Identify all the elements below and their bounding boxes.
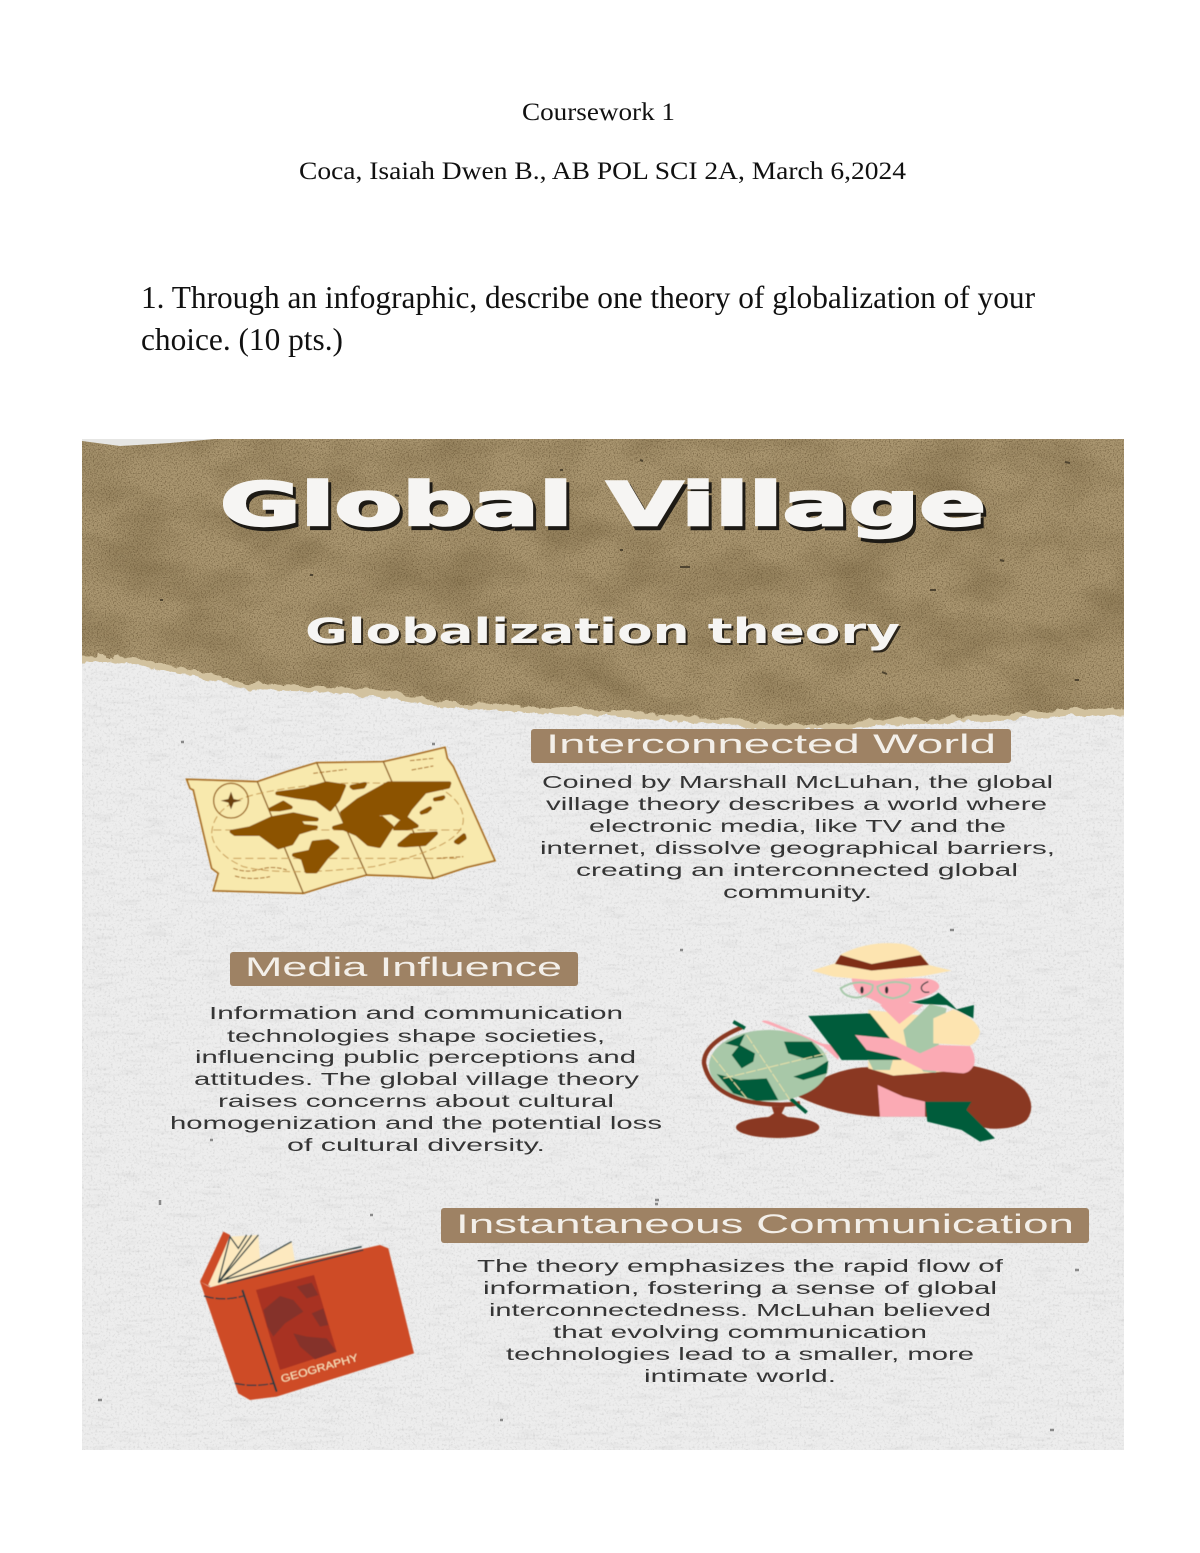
text block: Instantaneous Communication: that evolving communication (553, 1322, 927, 1342)
subtitle (305, 612, 902, 654)
legs (798, 1066, 1031, 1129)
text block: Instantaneous Communication: information, fostering a sense of global (483, 1278, 997, 1298)
title (220, 470, 989, 544)
heading: Interconnected World: Interconnected World (546, 729, 996, 759)
title: Global Village (223, 474, 989, 544)
document heading: coursework title: Coursework 1 (522, 99, 675, 126)
text block: Media Influence: of cultural diversity. (287, 1135, 545, 1155)
globe stand (704, 1027, 800, 1105)
icon: explorer with globe (704, 943, 1031, 1142)
text block: Interconnected World (540, 772, 1055, 902)
heading: Media Influence: Media Influence (245, 952, 562, 982)
icon: geography book (200, 1232, 414, 1400)
heading: Interconnected World (531, 729, 1011, 763)
text block: Interconnected World: village theory describes a world where (546, 794, 1047, 814)
book cover label: GEOGRAPHY (280, 1352, 360, 1386)
subtitle: Globalization theory (307, 614, 902, 654)
text block: Instantaneous Communication: technologies lead to a smaller, more (506, 1344, 974, 1364)
heading: Instantaneous Communication: Instantaneous Communication (456, 1209, 1074, 1239)
paper background (82, 439, 1124, 1450)
document byline: Coca, Isaiah Dwen B., AB POL SCI 2A, March 6,2024 (299, 158, 907, 185)
heading: Media Influence (230, 952, 578, 986)
heading: Instantaneous Communication (441, 1208, 1089, 1243)
text block: Instantaneous Communication: intimate world. (644, 1366, 836, 1386)
document question: 1. Through an infographic, describe one theory of globalization of your (141, 279, 1035, 315)
text block: Instantaneous Communication (477, 1256, 1003, 1386)
arms and tablet (762, 1020, 840, 1060)
text block: Interconnected World: community. (723, 882, 872, 902)
torn kraft paper banner (60, 428, 1145, 729)
hat (812, 943, 952, 981)
text block: Media Influence: influencing public perceptions and (195, 1047, 636, 1067)
text block: Instantaneous Communication: The theory emphasizes the rapid flow of (477, 1256, 1003, 1276)
text block: Interconnected World: internet, dissolve geographical barriers, (540, 838, 1055, 858)
panel: infographic (60, 428, 1145, 1450)
text block: Interconnected World: creating an interconnected global (576, 860, 1018, 880)
text block: Media Influence (170, 1003, 662, 1155)
text block: Interconnected World: electronic media, like TV and the (589, 816, 1006, 836)
text block: Media Influence: homogenization and the potential loss (170, 1113, 662, 1133)
icon: treasure world map (187, 747, 495, 893)
title: Global Village (220, 470, 986, 540)
text block: Media Influence: Information and communication (209, 1003, 623, 1023)
torso (868, 1010, 943, 1076)
document question: choice. (10 pts.) (141, 321, 343, 357)
head (852, 978, 939, 1009)
text block: Media Influence: technologies shape societies, (227, 1026, 605, 1046)
text block: Instantaneous Communication: interconnectedness. McLuhan believed (489, 1300, 991, 1320)
text block: Interconnected World: Coined by Marshall McLuhan, the global (542, 772, 1053, 792)
text block: Media Influence: raises concerns about cultural (218, 1091, 614, 1111)
document question (141, 279, 1035, 357)
globe (709, 1030, 828, 1101)
subtitle: Globalization theory (305, 612, 900, 652)
text block: Media Influence: attitudes. The global village theory (194, 1069, 639, 1089)
